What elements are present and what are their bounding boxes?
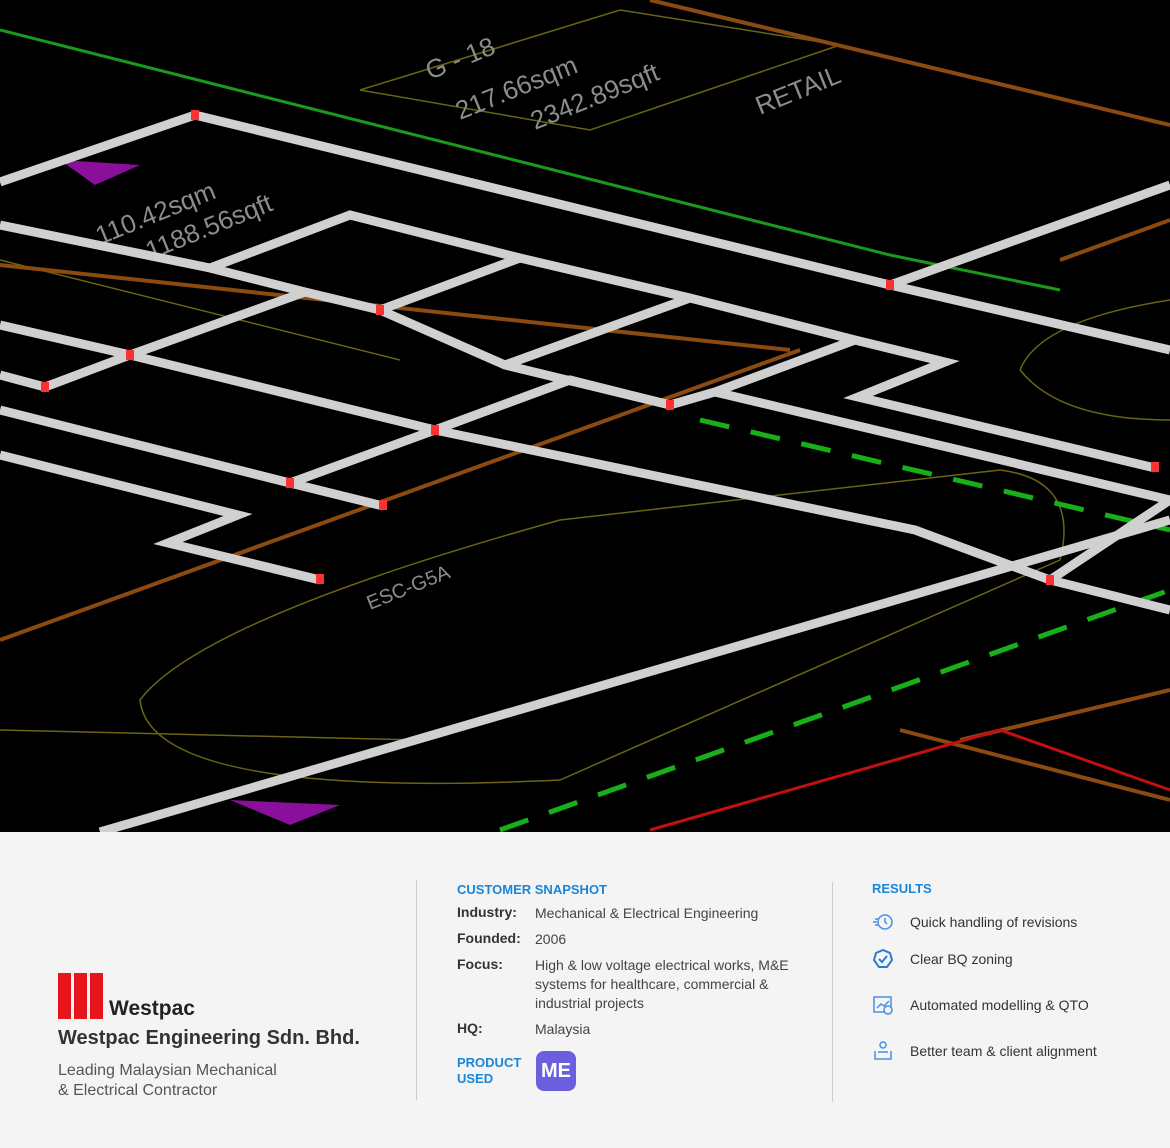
hero: CAD pipe drawing: 217.66sqm xyxy=(451,50,582,126)
panel: customer snapshot: HQ: xyxy=(457,1020,483,1036)
hero: CAD pipe drawing: G - 18 xyxy=(421,31,499,86)
heading: results: RESULTS xyxy=(872,881,932,896)
result: revisions: Quick handling of revisions xyxy=(910,914,1077,930)
hero: CAD pipe drawing: RETAIL xyxy=(751,59,845,121)
tagline: & Electrical Contractor xyxy=(58,1082,217,1099)
tagline: Leading Malaysian Mechanical xyxy=(58,1062,277,1079)
panel: customer snapshot: Focus: xyxy=(457,956,503,972)
logo: Westpac xyxy=(58,973,195,1020)
result: automated modelling xyxy=(873,996,1089,1015)
tagline xyxy=(58,1062,277,1099)
panel: customer snapshot: Founded: xyxy=(457,930,521,946)
hero: CAD pipe drawing: 2342.89sqft xyxy=(526,57,664,136)
hero: CAD pipe drawing xyxy=(0,0,1170,832)
result: team alignment: Better team & client alignment xyxy=(910,1043,1097,1059)
panel: customer snapshot: Mechanical & Electrical Engineering xyxy=(535,905,758,921)
hero: CAD pipe drawing: 110.42sqm xyxy=(91,175,220,251)
panel: results xyxy=(872,881,1097,1060)
hero: CAD pipe drawing: ESC-G5A xyxy=(364,561,454,615)
result: BQ zoning: Clear BQ zoning xyxy=(910,951,1013,967)
panel: customer snapshot xyxy=(457,882,789,1091)
company name: Westpac Engineering Sdn. Bhd. xyxy=(58,1027,360,1049)
result: automated modelling: Automated modelling & QTO xyxy=(910,997,1089,1013)
heading: customer snapshot: CUSTOMER SNAPSHOT xyxy=(457,882,607,897)
hero: CAD pipe drawing: 1188.56sqft xyxy=(141,187,277,266)
panel: company identity xyxy=(58,973,360,1099)
icon: ME product logo xyxy=(536,1051,576,1091)
panel: customer snapshot: Malaysia xyxy=(535,1021,590,1037)
product used: PRODUCT xyxy=(457,1055,521,1070)
product used xyxy=(457,1051,576,1091)
panel: customer snapshot: Industry: xyxy=(457,904,517,920)
icon: ME product logo: ME xyxy=(541,1060,571,1082)
product used: USED xyxy=(457,1071,493,1086)
result: BQ zoning xyxy=(872,948,1013,968)
logo: Westpac: Westpac xyxy=(109,997,195,1020)
panel: customer snapshot: 2006 xyxy=(535,931,566,947)
panel: customer snapshot: High & low voltage electrical works, M&E systems for healthcare, commercial & industrial projects xyxy=(535,957,789,1011)
